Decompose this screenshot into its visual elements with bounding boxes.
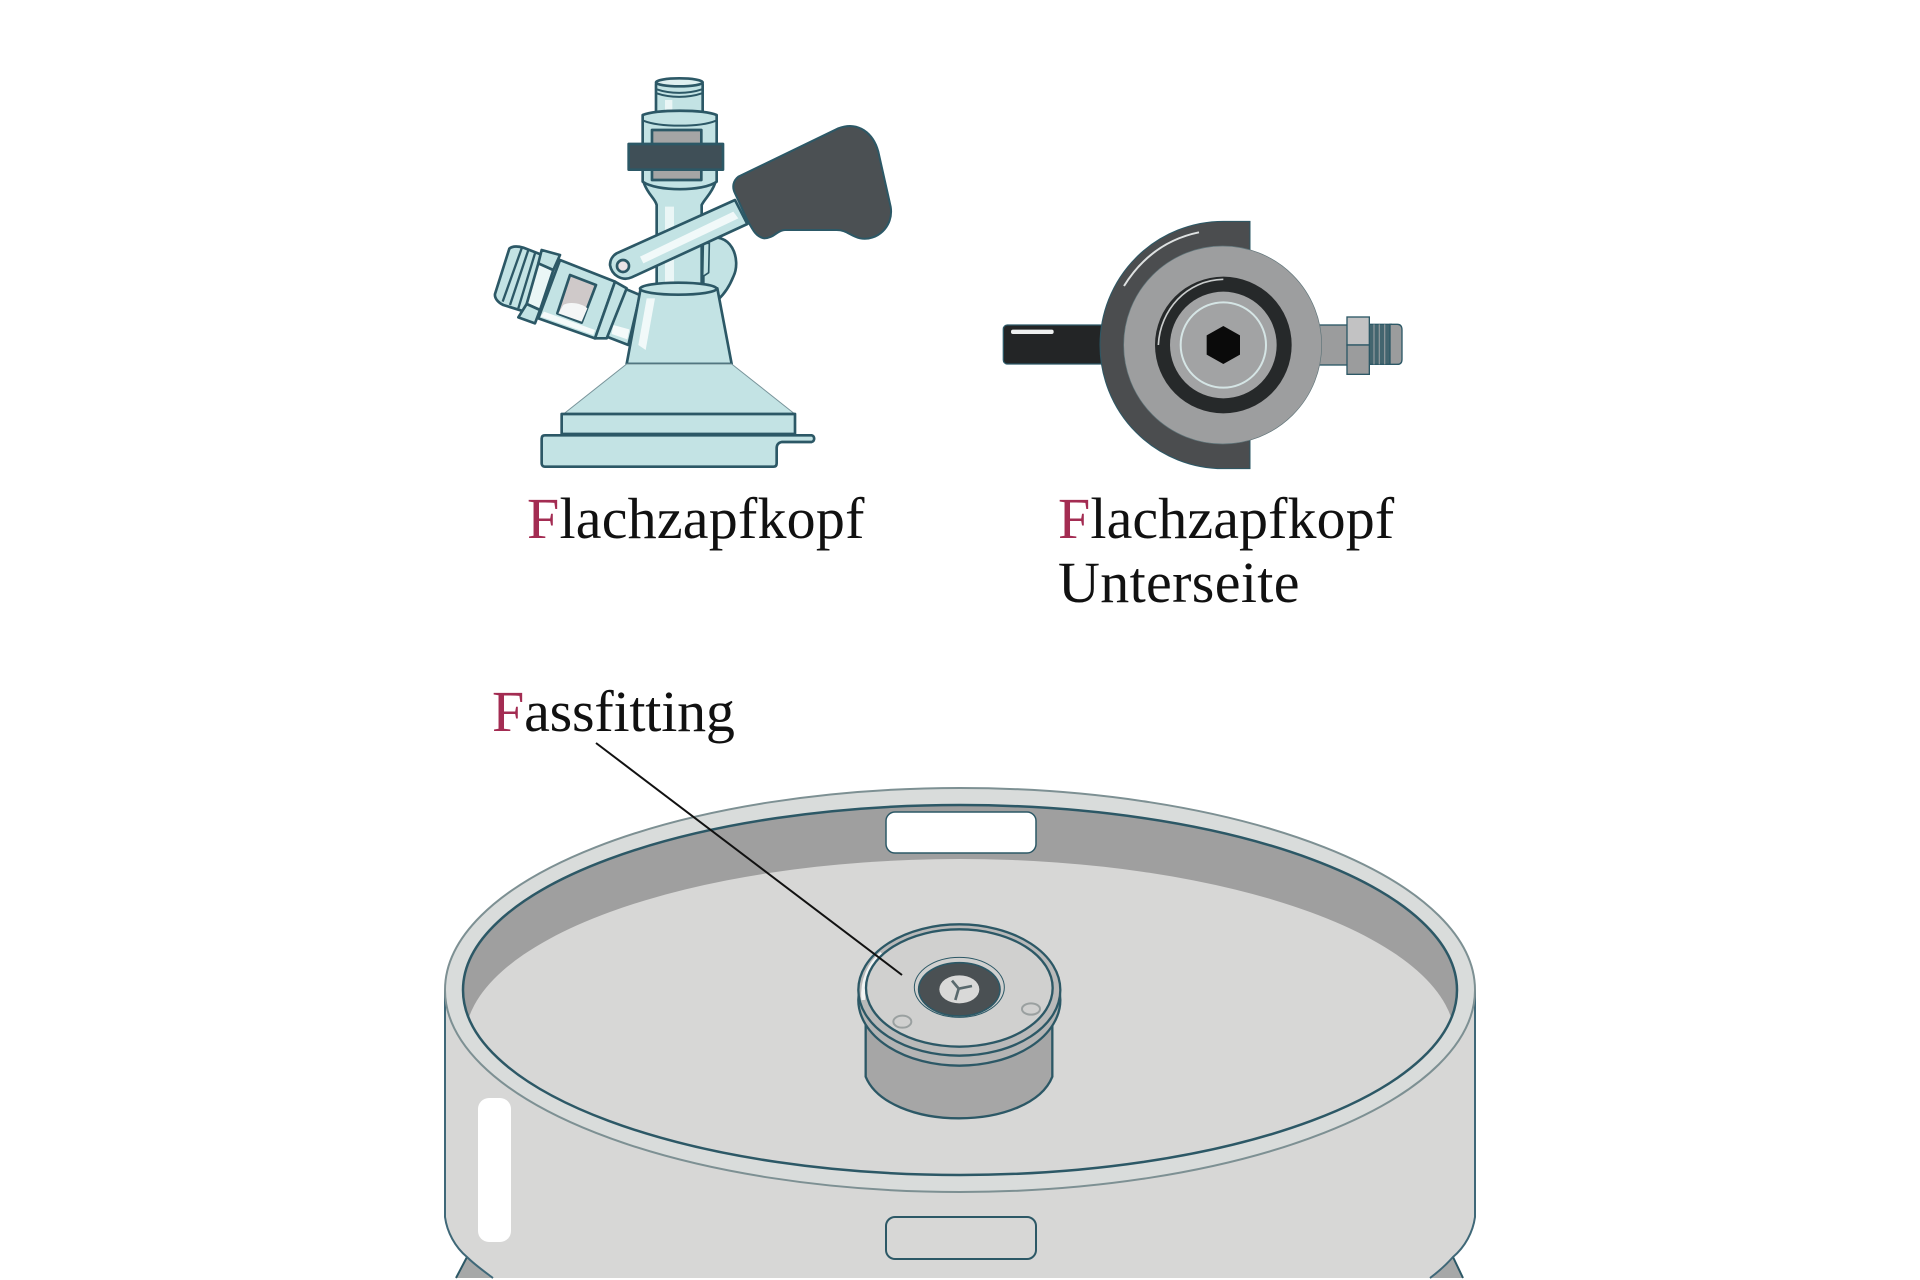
label: Fassfitting: Fassfitting [492,679,735,744]
back loop of the tap head [703,237,736,299]
illustration: Flachzapfkopf underside [1003,221,1402,469]
hexagonal opening [1207,326,1240,364]
outlet connector [1317,317,1402,374]
highlight on body [478,1098,511,1242]
illustration: keg top [445,788,1475,1278]
inner rim line [463,805,1457,1175]
keg floor [470,859,1450,1174]
cone body [627,283,732,364]
label: Flachzapfkopf: Flachzapfkopf [527,486,865,551]
outer rim [445,788,1475,1192]
fitting cylinder [866,1020,1052,1118]
base plate [562,414,795,434]
label: Flachzapfkopf Unterseite: Unterseite [1058,550,1300,615]
black lever [1003,325,1107,364]
collar with window and dark clamp bar [629,111,723,189]
dark half ring [1100,221,1250,469]
inner grey centre [1170,292,1277,398]
label: Flachzapfkopf Unterseite: Flachzapfkopf [1058,486,1394,551]
lower collar rings [858,924,1060,1066]
leader line [596,743,902,975]
bottom flange with tab [542,435,814,467]
valve opening [914,957,1004,1017]
dark grip [733,126,891,239]
lever arm [610,200,747,279]
top thread [656,78,703,115]
central stem [644,183,715,285]
grey disc [1124,246,1322,444]
illustration: Fassfitting [858,924,1060,1118]
black sealing ring [1155,277,1292,413]
keg body [445,990,1475,1278]
illustration: Flachzapfkopf side view [495,78,891,467]
top disc [866,929,1053,1047]
lower hand grip [886,1217,1036,1259]
keg feet [456,1257,1463,1278]
small holes [893,1003,1040,1028]
top hand grip [886,812,1036,853]
conical base [564,364,794,413]
side outlet connector [495,246,640,345]
inner wall [463,805,1457,1175]
